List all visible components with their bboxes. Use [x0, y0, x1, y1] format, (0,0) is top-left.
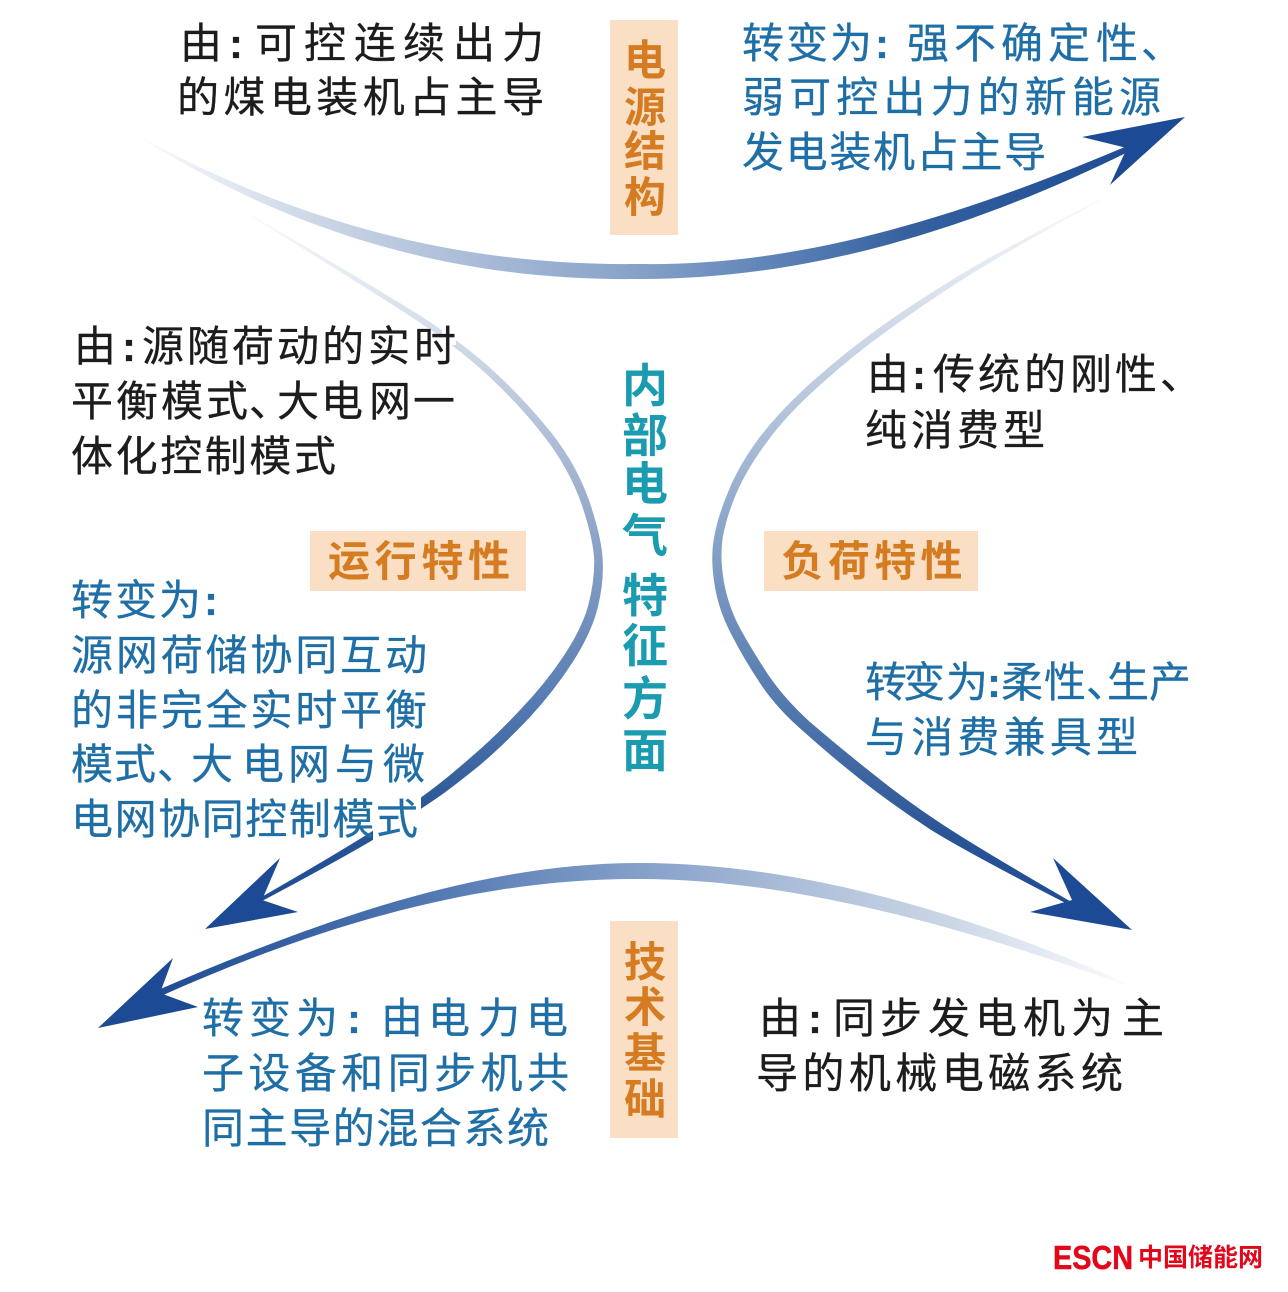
text: operating characteristics from: 由:源随荷动的实时 [74, 323, 456, 370]
text: power structure to: 发电装机占主导 [742, 129, 1046, 176]
text: load characteristics from [865, 351, 1202, 454]
text: load characteristics to: 转变为:柔性、生产 [865, 659, 1191, 706]
text: operating characteristics to: 源网荷储协同互动 [71, 632, 427, 679]
arrow: technical foundation (bottom curve) [98, 863, 1145, 1028]
arrow: power structure (top curve) [125, 117, 1185, 279]
text: power structure from: 的煤电装机占主导 [177, 74, 544, 121]
heading: internal electrical characteristics: 面 [622, 725, 668, 777]
arrow: load characteristics (right curve) [713, 200, 1132, 930]
heading: internal electrical characteristics: 气 [622, 510, 668, 562]
panel: operating characteristics label: 运行特性 [328, 538, 510, 585]
panel: power structure label [610, 20, 678, 235]
text: power structure to [742, 20, 1183, 176]
text: technical foundation to: 同主导的混合系统 [202, 1105, 549, 1152]
text: power structure to: 转变为: 强不确定性、 [742, 20, 1183, 67]
text: load characteristics to [865, 659, 1191, 761]
text: operating characteristics to [71, 577, 427, 843]
text: technical foundation from [756, 995, 1164, 1097]
panel: power structure label: 电 [624, 37, 666, 84]
heading: internal electrical characteristics: 内 [622, 360, 668, 412]
text: technical foundation from: 由: 同步发电机为主 [759, 995, 1164, 1042]
text: operating characteristics to: 转变为: [71, 577, 218, 624]
text: technical foundation from: 导的机械电磁系统 [756, 1050, 1123, 1097]
text: operating characteristics to: 模式、大电网与微 [71, 741, 425, 788]
panel: load characteristics label: 负荷特性 [782, 538, 962, 585]
text: power structure from: 由: 可控连续出力 [180, 20, 544, 67]
logo: ESCN watermark [1053, 1239, 1263, 1276]
text: power structure to: 弱可控出力的新能源 [742, 74, 1161, 121]
text: technical foundation to: 子设备和同步机共 [202, 1050, 569, 1097]
text: operating characteristics from [71, 323, 456, 480]
panel: technical foundation label [610, 921, 678, 1138]
text: power structure from [177, 20, 544, 121]
heading: internal electrical characteristics: 方 [622, 673, 668, 725]
text: operating characteristics to: 的非完全实时平衡 [71, 687, 427, 734]
text: operating characteristics from: 体化控制模式 [71, 433, 336, 480]
text: technical foundation to [202, 995, 569, 1152]
text: load characteristics from: 由:传统的刚性、 [867, 351, 1202, 398]
text: operating characteristics to: 电网协同控制模式 [71, 796, 418, 843]
text: operating characteristics from: 平衡模式、大电网一 [71, 378, 455, 425]
panel: load characteristics label [764, 531, 978, 591]
panel: technical foundation label: 础 [624, 1076, 666, 1123]
text: load characteristics from: 纯消费型 [865, 407, 1045, 454]
heading: internal electrical characteristics: 电 [622, 458, 668, 510]
logo: ESCN watermark: ESCN [1053, 1239, 1133, 1276]
panel: technical foundation label: 术 [624, 984, 666, 1031]
text: load characteristics to: 与消费兼具型 [865, 714, 1138, 761]
panel: operating characteristics label [310, 531, 526, 591]
panel: power structure label: 源 [624, 84, 666, 131]
panel: technical foundation label: 基 [624, 1030, 666, 1077]
heading: internal electrical characteristics: 征 [622, 620, 668, 672]
text: technical foundation to: 转变为: 由电力电 [202, 995, 568, 1042]
heading: internal electrical characteristics: 部 [622, 410, 668, 462]
arrow: operating characteristics (left curve) [205, 215, 602, 929]
heading: internal electrical characteristics: 特 [622, 570, 668, 622]
heading: internal electrical characteristics [622, 360, 668, 777]
panel: power structure label: 构 [624, 174, 666, 221]
panel: technical foundation label: 技 [624, 939, 666, 986]
panel: power structure label: 结 [624, 128, 666, 175]
logo: ESCN watermark: 中国储能网 [1138, 1244, 1263, 1272]
